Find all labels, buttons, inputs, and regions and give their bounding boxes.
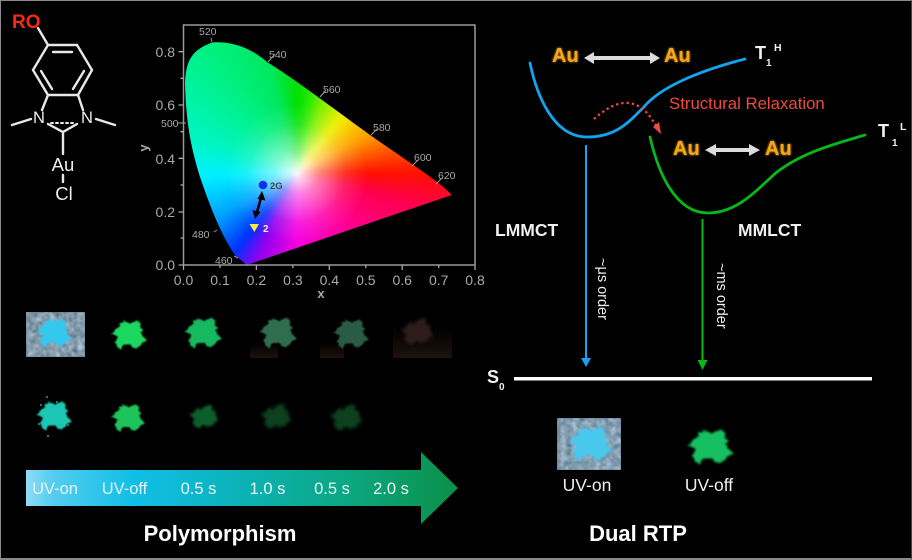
label: UV-off: UV-off — [685, 475, 733, 495]
CIE chart axes and labels: 0.1 — [210, 272, 230, 288]
Au labels — [552, 45, 792, 160]
CIE chart axes and labels: 0.6 — [392, 272, 412, 288]
CIE chart axes and labels: 480 — [192, 229, 210, 241]
blue T1H curve — [530, 59, 745, 137]
CIE chart axes and labels: 0.2 — [247, 272, 266, 288]
CIE chart axes and labels: 560 — [323, 84, 341, 96]
time arrow: 1.0 s — [250, 480, 285, 498]
structural relaxation arrow — [594, 103, 658, 129]
state labels: T — [755, 43, 766, 63]
heading: Dual RTP: Dual RTP — [589, 521, 687, 546]
ground state line — [514, 377, 872, 380]
CIE chart axes and labels: 580 — [373, 122, 391, 134]
CIE chart axes and labels: x — [317, 286, 325, 301]
chemical structure: N — [81, 109, 93, 127]
state labels: MMLCT — [738, 220, 801, 240]
state labels: L — [900, 121, 907, 133]
energy diagram: ~ms order — [713, 263, 729, 329]
time arrow: 2.0 s — [373, 480, 409, 498]
Au labels: Au — [664, 45, 691, 67]
state labels: S — [487, 367, 499, 387]
state labels: H — [774, 42, 782, 54]
chemical structure: RO — [12, 12, 40, 33]
energy diagram: Structural Relaxation — [669, 94, 825, 113]
data point 2G: 2G — [270, 181, 283, 192]
CIE chart axes and labels: 0.6 — [156, 97, 175, 113]
CIE chart axes and labels: 0.3 — [283, 272, 303, 288]
CIE chart axes and labels: y — [136, 144, 151, 152]
Au double arrows — [584, 52, 760, 156]
energy diagram: ~μs order — [594, 258, 610, 320]
double arrow between 2 and 2G — [257, 198, 261, 212]
data point 2: 2 — [263, 224, 269, 235]
time arrow: UV-off — [102, 480, 148, 498]
chemical structure: N — [33, 109, 45, 127]
chemical structure: Cl — [55, 183, 73, 204]
CIE chart axes and labels: 0.0 — [174, 272, 193, 288]
state labels: 0 — [499, 382, 505, 393]
CIE chart axes and labels: 0.8 — [465, 272, 485, 288]
green T1L curve — [650, 135, 865, 213]
time arrow: UV-on — [32, 480, 78, 498]
data point 2 — [250, 224, 269, 235]
state labels: LMMCT — [495, 220, 558, 240]
state labels: 1 — [892, 138, 898, 149]
Au labels: Au — [765, 138, 792, 160]
Au labels: Au — [552, 45, 579, 67]
CIE chart axes and labels: 620 — [438, 170, 456, 182]
time arrow: 0.5 s — [314, 480, 350, 498]
data point 2G — [259, 181, 283, 192]
label: UV-on: UV-on — [563, 475, 611, 495]
state labels — [487, 42, 907, 393]
chemical structure: Au — [52, 154, 74, 175]
Au labels: Au — [673, 138, 700, 160]
CIE chart axes and labels: 0.5 — [356, 272, 376, 288]
CIE chart axes and labels: 600 — [414, 152, 432, 164]
CIE chart axes and labels: 500 — [161, 118, 179, 130]
CIE chart axes and labels: 520 — [199, 26, 217, 38]
CIE chart axes and labels: 0.0 — [156, 257, 175, 273]
CIE chart axes and labels: 0.7 — [429, 272, 449, 288]
CIE chart axes and labels: 0.4 — [156, 151, 175, 167]
CIE chart axes and labels: 460 — [215, 255, 233, 267]
green emission arrow — [702, 219, 704, 362]
blue emission arrow — [585, 145, 587, 360]
CIE chromaticity gamut — [185, 42, 452, 264]
CIE chart axes and labels: 0.4 — [320, 272, 339, 288]
chemical structure — [10, 12, 116, 204]
CIE chart axes and labels: 0.2 — [156, 204, 175, 220]
state labels: T — [878, 121, 889, 141]
CIE chart axes and labels: 0.8 — [156, 44, 175, 60]
time arrow: 0.5 s — [181, 480, 216, 498]
CIE chart axes and labels: 540 — [269, 49, 287, 61]
heading: Polymorphism: Polymorphism — [144, 521, 296, 546]
state labels: 1 — [766, 58, 772, 69]
